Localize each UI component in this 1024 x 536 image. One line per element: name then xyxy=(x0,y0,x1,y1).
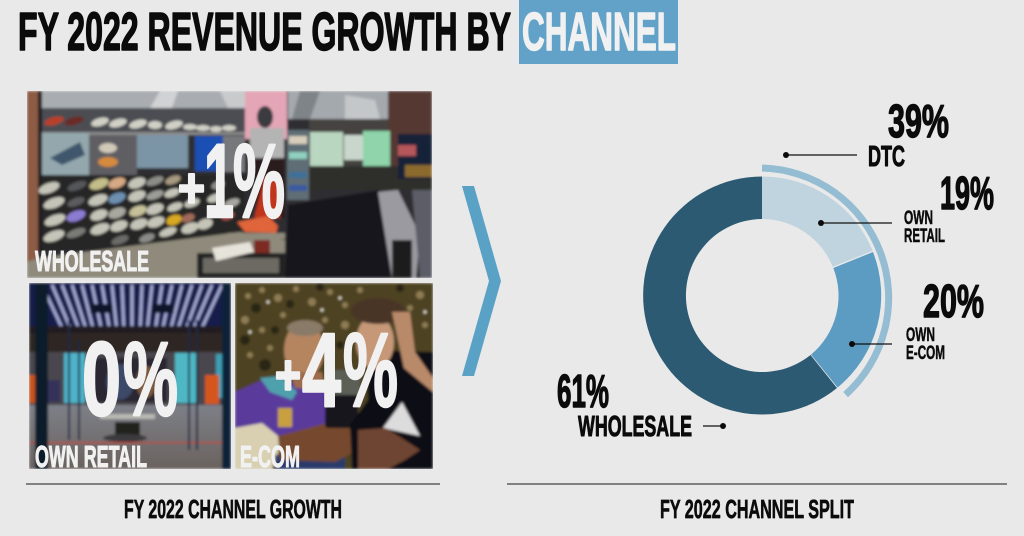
callout: own retail 19% xyxy=(818,167,994,247)
callout: own e-com 20% xyxy=(849,275,984,364)
title: FY 2022 REVENUE GROWTH BY xyxy=(18,2,511,62)
callout: wholesale 61%: 61% xyxy=(557,365,609,417)
callout: own retail 19%: RETAIL xyxy=(904,226,945,247)
callout: DTC 39%: DTC xyxy=(868,141,905,173)
donut chart xyxy=(643,168,889,414)
segment: own retail 19% xyxy=(762,176,873,267)
callout: wholesale 61% xyxy=(557,365,726,443)
arc: DTC bracket xyxy=(762,168,889,395)
label: wholesale: WHOLESALE xyxy=(35,246,149,278)
big number: wholesale growth: + xyxy=(178,156,205,219)
callout: own e-com 20%: OWN xyxy=(906,325,935,346)
title highlight: channel: CHANNEL xyxy=(522,2,676,62)
callout: own e-com 20%: 20% xyxy=(923,275,984,327)
big number: e-com growth: % xyxy=(343,312,398,429)
callout: own retail 19%: OWN xyxy=(904,208,933,229)
segment: own e-com 20% xyxy=(811,252,881,388)
callout: wholesale 61%: WHOLESALE xyxy=(578,411,692,443)
segment: wholesale 61% xyxy=(643,176,837,414)
caption: channel growth: FY 2022 CHANNEL GROWTH xyxy=(124,494,342,524)
big number: e-com growth: + xyxy=(275,343,301,406)
label: own retail: OWN RETAIL xyxy=(35,439,147,474)
big number: wholesale growth: 1 xyxy=(204,123,234,240)
label: e-com: E-COM xyxy=(240,439,300,474)
big number: wholesale growth: % xyxy=(233,123,285,240)
panel: wholesale photo xyxy=(27,91,432,278)
callout: own e-com 20%: E-COM xyxy=(906,343,945,364)
arrow: chevron xyxy=(462,186,501,376)
big number: wholesale growth xyxy=(178,123,285,240)
title highlight: channel xyxy=(519,0,678,64)
big number: e-com growth: 4 xyxy=(302,312,341,429)
caption: channel split: FY 2022 CHANNEL SPLIT xyxy=(660,494,854,524)
callout: DTC 39% xyxy=(783,95,949,173)
big number: own retail growth: 0 xyxy=(82,321,121,438)
panel: own retail photo xyxy=(29,283,231,474)
callout: DTC 39%: 39% xyxy=(888,95,949,147)
big number: own retail growth: % xyxy=(123,321,178,438)
panel: e-com photo xyxy=(235,283,433,474)
big number: e-com growth xyxy=(275,312,398,429)
big number: own retail growth xyxy=(82,321,178,438)
